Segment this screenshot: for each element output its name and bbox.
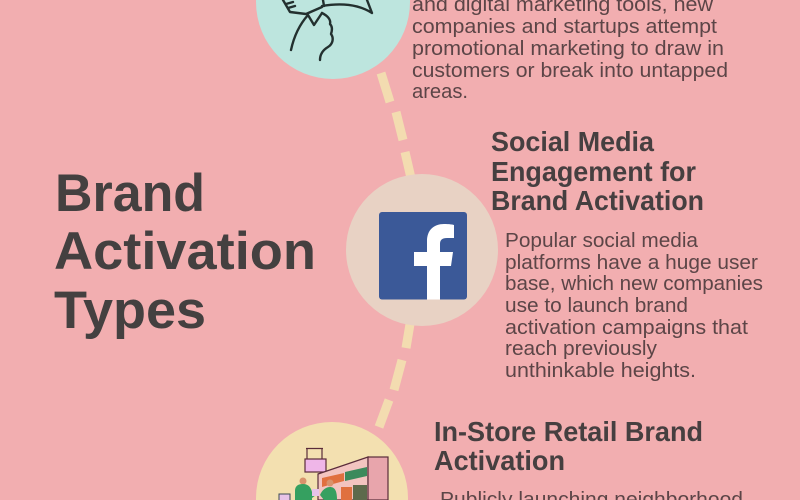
title: Types <box>54 281 206 340</box>
title <box>54 164 316 340</box>
social media body text: Popular social media <box>505 229 699 252</box>
social media body text: base, which new companies <box>505 272 763 295</box>
title: Brand <box>55 164 205 223</box>
social media body text: activation campaigns that <box>505 316 748 339</box>
social media body text: platforms have a huge user <box>505 251 758 274</box>
top body text: areas. <box>412 80 468 103</box>
heading: in-store retail <box>434 416 703 476</box>
icon: megaphone in teal circle <box>256 0 410 79</box>
social media body text <box>505 229 763 382</box>
top body text: promotional marketing to draw in <box>412 37 724 60</box>
heading: in-store retail: Activation <box>434 445 565 476</box>
heading: social media engagement: Social Media <box>491 126 654 157</box>
top body text: companies and startups attempt <box>412 15 717 38</box>
top body text: customers or break into untapped <box>412 59 728 82</box>
top body text <box>412 0 728 103</box>
dashed connector path <box>379 73 411 427</box>
heading: social media engagement: Brand Activation <box>491 185 704 216</box>
heading: social media engagement <box>491 126 704 216</box>
heading: social media engagement: Engagement for <box>491 156 696 187</box>
title: Activation <box>54 222 316 281</box>
icon: retail store in cream circle <box>256 422 408 500</box>
icon: Facebook logo in beige circle <box>346 174 498 326</box>
heading: in-store retail: In-Store Retail Brand <box>434 416 703 447</box>
social media body text: unthinkable heights. <box>505 359 696 382</box>
social media body text: use to launch brand <box>505 294 688 317</box>
social media body text: reach previously <box>505 337 658 360</box>
